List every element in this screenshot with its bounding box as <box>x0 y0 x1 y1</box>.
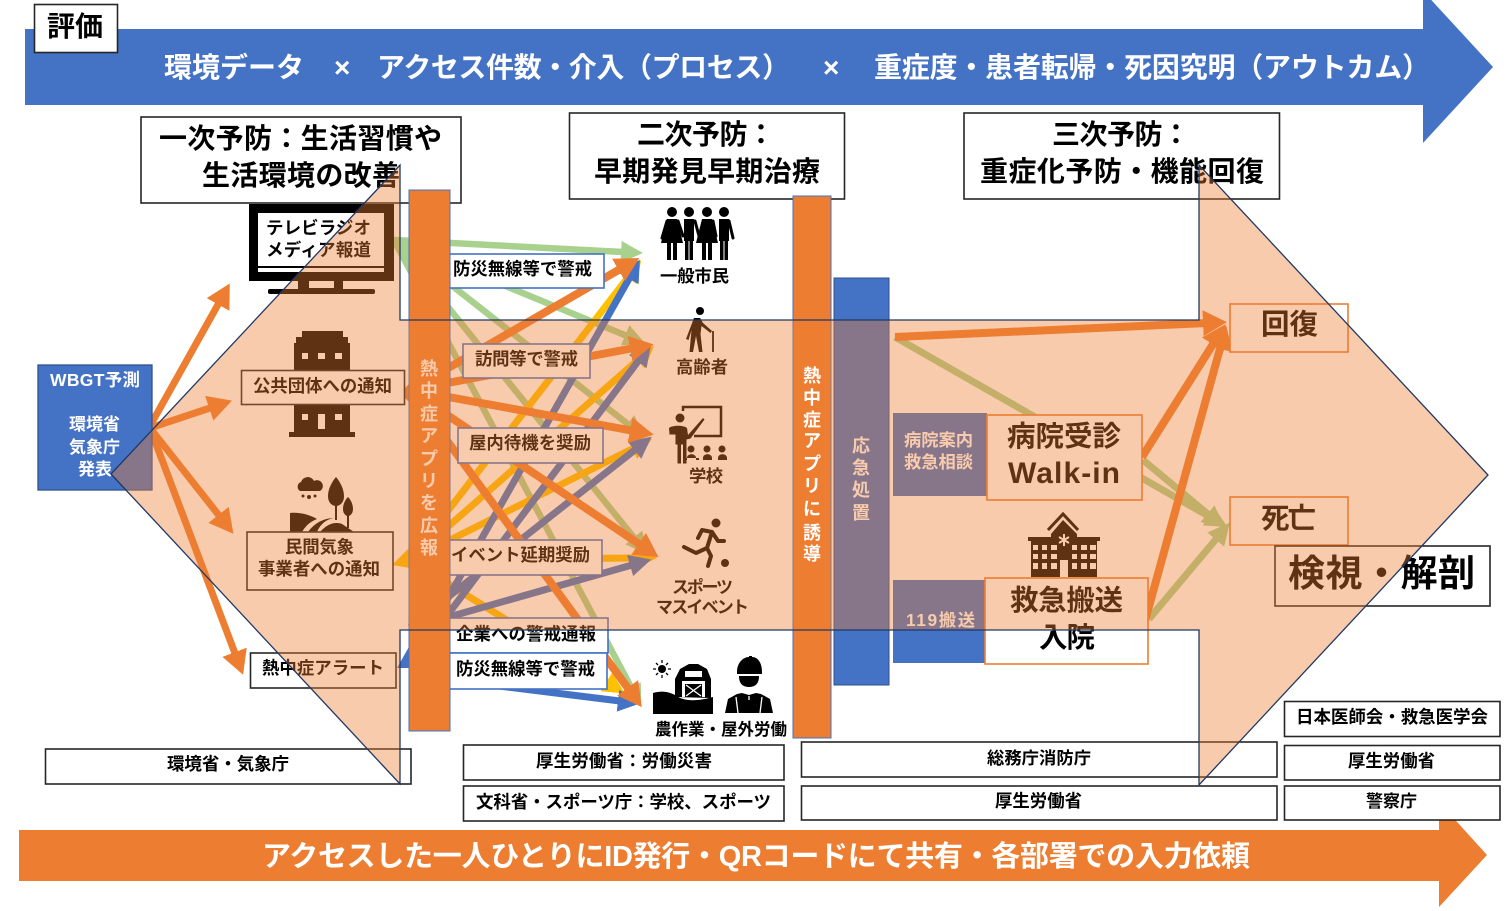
first aid bar: 急 <box>852 457 870 478</box>
app promotion bar: リ <box>420 471 438 491</box>
panel: emergency transport and admission: 救急搬送 <box>1010 585 1123 617</box>
label: home visit warning: 訪問等で警戒 <box>475 349 578 369</box>
app promotion bar: 報 <box>420 538 438 558</box>
first aid bar: 応 <box>852 436 870 456</box>
label: sports and mass events: マスイベント <box>656 598 749 617</box>
app guidance bar text: 中 <box>803 388 821 408</box>
label: notification to weather companies: 民間気象 <box>285 537 354 557</box>
app guidance bar text: リ <box>803 476 821 496</box>
panel: hospital guidance: 病院案内 <box>904 430 973 450</box>
heading: primary prevention: 一次予防：生活習慣や <box>159 123 442 154</box>
agency: police <box>1284 786 1500 820</box>
top evaluation arrow: × <box>334 52 350 83</box>
label: disaster radio warning lower <box>440 653 607 689</box>
panel: emergency transport and admission <box>985 578 1148 664</box>
first aid bar <box>834 278 889 685</box>
agency: health ministry right: 厚生労働省 <box>1348 751 1435 771</box>
label: heat alert <box>250 653 396 688</box>
evaluation label: 評価 <box>47 11 103 42</box>
icon: farm and outdoor worker <box>653 656 773 714</box>
agency: health ministry centre <box>802 786 1277 820</box>
heading: secondary prevention: 早期発見早期治療 <box>594 156 820 187</box>
agency: medical associations <box>1284 702 1500 736</box>
label: agriculture and outdoor labour: 農作業・屋外労働 <box>655 720 787 739</box>
agency: environment ministry <box>46 749 411 784</box>
panel: 119 transport: 119搬送 <box>906 610 975 630</box>
label: notification to weather companies <box>247 532 393 590</box>
label: postpone events: イベント延期奨励 <box>451 545 590 565</box>
agency: labour accidents <box>464 745 784 780</box>
app guidance bar text: に <box>803 499 821 519</box>
icon: elderly person <box>686 307 713 352</box>
app promotion bar: 熱 <box>420 359 438 379</box>
top evaluation arrow: 重症度・患者転帰・死因究明（アウトカム） <box>874 52 1430 83</box>
icon: TV with media label: テレビラジオ <box>266 218 371 238</box>
label: stay indoors <box>458 428 603 463</box>
heading: secondary prevention: 二次予防： <box>637 119 775 150</box>
label: heat alert: 熱中症アラート <box>262 658 384 678</box>
label: general public: 一般市民 <box>660 266 729 286</box>
panel: autopsy: 検視・解剖 <box>1288 553 1475 594</box>
icon: TV with media label <box>249 204 394 294</box>
agency: fire department: 総務庁消防庁 <box>987 748 1091 768</box>
icon: hospital <box>1028 514 1100 577</box>
label: stay indoors: 屋内待機を奨励 <box>469 433 591 453</box>
label: disaster radio warning: 防災無線等で警戒 <box>453 259 592 279</box>
label: notification to weather companies: 事業者への通知 <box>258 559 380 579</box>
label: elderly: 高齢者 <box>676 357 728 377</box>
agency: education and sports: 文科省・スポーツ庁：学校、スポーツ <box>476 792 771 812</box>
heading: secondary prevention <box>570 113 844 199</box>
heading: primary prevention <box>141 117 461 203</box>
label: postpone events <box>440 540 602 575</box>
outcome: recovery <box>1230 304 1348 352</box>
arrows from WBGT source <box>150 301 236 656</box>
top evaluation arrow: 環境データ <box>164 51 304 83</box>
icon: public building <box>289 331 355 437</box>
label: sports and mass events: スポーツ <box>672 577 733 597</box>
app promotion bar: ア <box>420 426 438 446</box>
panel: hospital guidance <box>893 413 987 496</box>
agency: environment ministry: 環境省・気象庁 <box>167 754 289 774</box>
top evaluation arrow: × <box>823 52 839 83</box>
panel: WBGT forecast: 環境省 <box>69 415 120 434</box>
app guidance bar text: 誘 <box>803 523 821 543</box>
icon: school teacher and students <box>669 407 727 464</box>
app guidance bar text: 熱 <box>803 366 821 386</box>
outcome: death: 死亡 <box>1261 503 1316 535</box>
agency: education and sports <box>464 786 784 821</box>
agency: police: 警察庁 <box>1366 792 1417 811</box>
small arrowheads pointing left from app bar <box>392 383 410 668</box>
top evaluation arrow <box>25 0 1493 143</box>
label: disaster radio warning lower: 防災無線等で警戒 <box>456 659 595 679</box>
outcome: recovery: 回復 <box>1261 309 1318 341</box>
agency: medical associations: 日本医師会・救急医学会 <box>1296 707 1488 727</box>
green arrows: media to audiences <box>394 240 635 689</box>
app guidance bar text: 症 <box>803 410 821 430</box>
heading: primary prevention: 生活環境の改善 <box>202 160 400 191</box>
translucent double-headed arrow overlay <box>111 165 1488 785</box>
bottom ID sharing arrow <box>19 802 1487 907</box>
panel: walk-in: Walk-in <box>1008 457 1120 490</box>
label: notification to public bodies: 公共団体への通知 <box>253 376 392 396</box>
yellow arrows: private forecasters to audiences <box>410 276 639 683</box>
panel: WBGT forecast <box>38 365 152 490</box>
label: school: 学校 <box>689 466 723 486</box>
app guidance bar text: 導 <box>803 544 821 564</box>
panel: autopsy <box>1275 546 1490 606</box>
app promotion bar <box>409 190 450 731</box>
bottom ID sharing arrow: アクセスした一人ひとりにID発行・QRコードにて共有・各部署での入力依頼 <box>262 840 1250 873</box>
panel: WBGT forecast: 気象庁 <box>69 437 120 457</box>
panel: 119 transport <box>893 580 986 663</box>
blue arrows: heat alert to audiences <box>410 277 639 701</box>
heading: tertiary prevention: 三次予防： <box>1052 119 1190 150</box>
icon: running sports <box>684 518 729 567</box>
panel: WBGT forecast: 発表 <box>78 460 112 479</box>
evaluation label <box>34 4 118 52</box>
right flow lines: orange to recovery <box>895 323 1221 621</box>
app promotion bar: プ <box>420 449 438 469</box>
panel: WBGT forecast: WBGT予測 <box>50 370 140 390</box>
orange arrows: public bodies to audiences <box>410 268 642 691</box>
agency: labour accidents: 厚生労働省：労働災害 <box>536 751 712 771</box>
heading: tertiary prevention: 重症化予防・機能回復 <box>980 156 1264 187</box>
top evaluation arrow: アクセス件数・介入（プロセス） <box>377 52 790 83</box>
label: company warning <box>440 618 608 653</box>
label: disaster radio warning <box>440 254 604 288</box>
panel: walk-in: 病院受診 <box>1007 421 1121 453</box>
agency: health ministry centre: 厚生労働省 <box>995 791 1082 811</box>
panel: walk-in <box>987 415 1142 500</box>
app guidance bar text: ア <box>803 431 821 451</box>
label: notification to public bodies <box>242 370 404 404</box>
first aid bar: 置 <box>852 503 870 523</box>
first aid bar: 処 <box>852 480 870 500</box>
app guidance bar <box>793 196 831 738</box>
outcome: death <box>1230 497 1348 545</box>
panel: emergency transport and admission: 入院 <box>1039 622 1095 654</box>
right flow lines: olive to death <box>895 337 1217 619</box>
icon: TV with media label: メディア報道 <box>266 240 372 260</box>
label: home visit warning <box>463 344 590 378</box>
label: sports and mass events <box>656 577 749 617</box>
agency: health ministry right <box>1284 746 1500 780</box>
app promotion bar: 広 <box>420 516 438 536</box>
agency: fire department <box>802 742 1277 777</box>
heading: tertiary prevention <box>964 113 1280 199</box>
app guidance bar text: プ <box>803 454 821 474</box>
icon: weather, trees and hills <box>290 477 354 532</box>
app promotion bar: を <box>420 493 438 513</box>
app promotion bar: 中 <box>420 381 438 401</box>
label: company warning: 企業への警戒通報 <box>456 624 597 644</box>
icon: general public <box>661 207 733 260</box>
panel: hospital guidance: 救急相談 <box>904 452 973 472</box>
app promotion bar: 症 <box>420 404 438 424</box>
